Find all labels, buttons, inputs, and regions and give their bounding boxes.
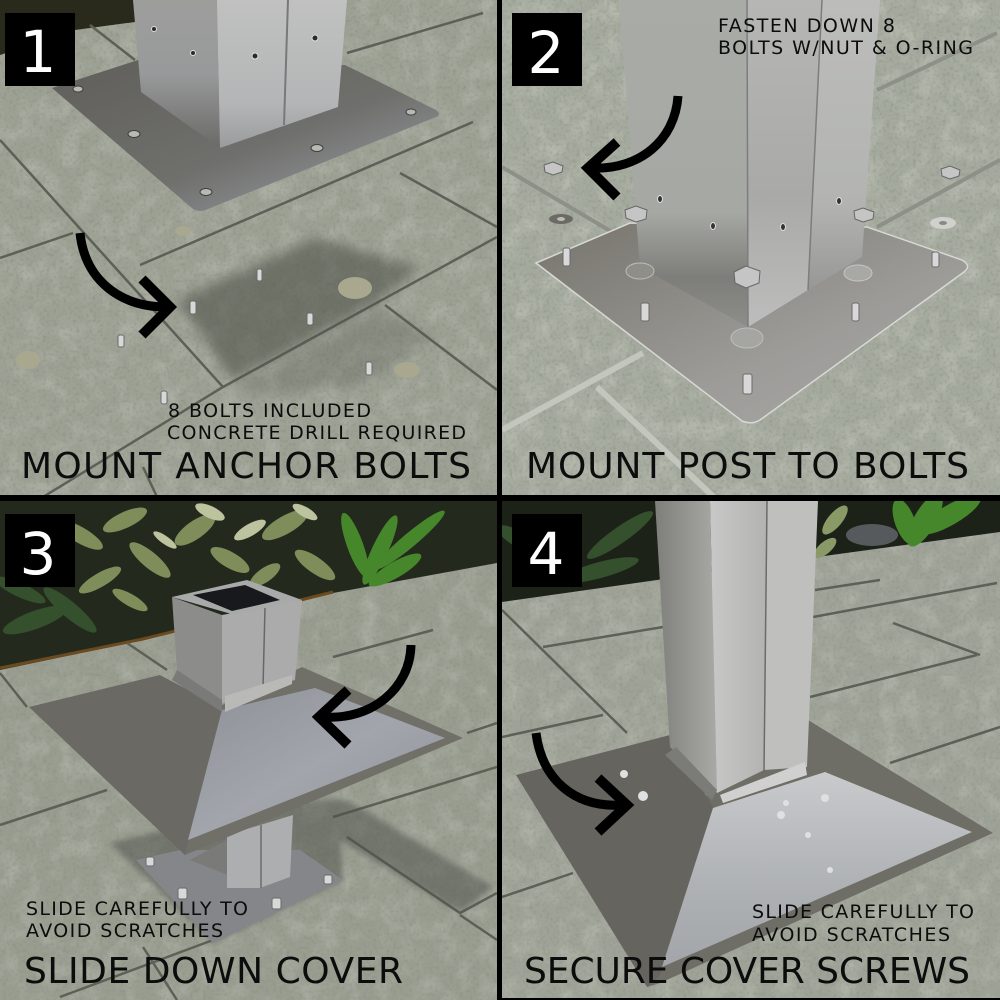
heading 4: SECURE COVER SCREWS bbox=[524, 951, 970, 992]
panel 3: slide down cover bbox=[0, 500, 497, 1000]
panel 4: secure cover screws bbox=[493, 489, 1000, 1000]
concrete ground 3 bbox=[0, 563, 497, 1000]
number 4: 4 bbox=[528, 520, 564, 588]
note 2: FASTEN DOWN 8 bbox=[718, 15, 895, 37]
note 1: 8 BOLTS INCLUDED bbox=[168, 400, 371, 422]
note 3: AVOID SCRATCHES bbox=[26, 920, 223, 942]
note 3: SLIDE CAREFULLY TO bbox=[26, 898, 248, 920]
base plate bbox=[536, 223, 968, 423]
arrow 1 bbox=[80, 233, 170, 335]
number 3 bbox=[5, 514, 75, 588]
number 3: 3 bbox=[20, 520, 56, 588]
lower shadow on ground 1 bbox=[240, 310, 435, 395]
cover light side 3 bbox=[188, 688, 445, 840]
plate holes bbox=[73, 86, 416, 196]
note 4: SLIDE CAREFULLY TO bbox=[752, 901, 974, 923]
nuts bbox=[544, 162, 960, 288]
cover outer frame 3 bbox=[175, 667, 463, 855]
note 2 bbox=[720, 18, 972, 56]
note 4 bbox=[752, 901, 974, 946]
concrete ground 2 bbox=[502, 0, 1000, 495]
plants background 4 bbox=[502, 501, 1000, 602]
arrow 4 bbox=[536, 733, 627, 832]
cover light side 4 bbox=[662, 772, 972, 967]
heading 3: SLIDE DOWN COVER bbox=[24, 951, 403, 992]
cover dark side 3 bbox=[29, 675, 222, 855]
speckle 2 bbox=[502, 0, 1000, 495]
heading 1: MOUNT ANCHOR BOLTS bbox=[21, 446, 471, 487]
flange 4 bbox=[665, 747, 807, 803]
number 2 bbox=[512, 13, 582, 87]
panel 1: mount anchor bolts bbox=[0, 0, 497, 497]
note 2: BOLTS W/NUT & O-RING bbox=[718, 37, 973, 59]
mottling 3 bbox=[0, 570, 497, 1000]
note 1: CONCRETE DRILL REQUIRED bbox=[167, 422, 466, 444]
note 3 bbox=[26, 898, 248, 942]
dents 1 bbox=[16, 226, 420, 378]
shadow on ground 1 bbox=[177, 238, 420, 380]
cover collar 3 bbox=[172, 580, 302, 712]
number 2: 2 bbox=[528, 19, 564, 87]
mottling 1 bbox=[0, 0, 497, 495]
panel 2: mount post to bolts bbox=[502, 0, 1000, 500]
mottling 2 bbox=[502, 0, 1000, 495]
post bbox=[619, 0, 880, 327]
paving joints 3 bbox=[0, 630, 497, 1000]
number 1 bbox=[5, 13, 75, 86]
note 4: AVOID SCRATCHES bbox=[752, 924, 950, 946]
lower post 3 bbox=[190, 815, 293, 888]
cover outer frame 4 bbox=[647, 720, 993, 987]
foliage 4 bbox=[493, 489, 985, 588]
speckle 1 bbox=[0, 0, 497, 495]
post bbox=[133, 0, 347, 148]
studs bbox=[563, 248, 939, 394]
number 4 bbox=[512, 514, 582, 588]
base plate 3 bbox=[136, 850, 343, 943]
paving joints 4 bbox=[502, 580, 1000, 897]
paving joints 2 bbox=[502, 33, 1000, 500]
cover dark side 4 bbox=[516, 735, 713, 987]
screws 4 bbox=[620, 770, 833, 873]
concrete ground 1 bbox=[0, 0, 497, 495]
washers bbox=[549, 214, 956, 348]
foliage 3 bbox=[0, 500, 449, 640]
note 1 bbox=[168, 403, 465, 442]
post holes bbox=[658, 196, 842, 230]
post holes bbox=[152, 26, 318, 59]
arrow 2 bbox=[588, 96, 678, 197]
number 1: 1 bbox=[20, 18, 56, 86]
mottling 4 bbox=[502, 501, 1000, 1000]
plants corner 1 bbox=[0, 0, 135, 55]
arrow 3 bbox=[319, 645, 411, 745]
speckle 3 bbox=[0, 501, 497, 1000]
paving joints 1 bbox=[0, 13, 497, 497]
plate bolts 3 bbox=[146, 857, 332, 909]
speckle 4 bbox=[502, 501, 1000, 1000]
soil edge 3 bbox=[0, 592, 333, 668]
concrete ground 4 bbox=[502, 501, 1000, 1000]
anchor bolts bbox=[118, 269, 372, 404]
heading 2: MOUNT POST TO BOLTS bbox=[526, 446, 969, 487]
post 4 bbox=[655, 501, 818, 793]
plants background 3 bbox=[0, 501, 497, 670]
base plate bbox=[52, 60, 439, 211]
shadow on ground 3 bbox=[110, 800, 493, 943]
